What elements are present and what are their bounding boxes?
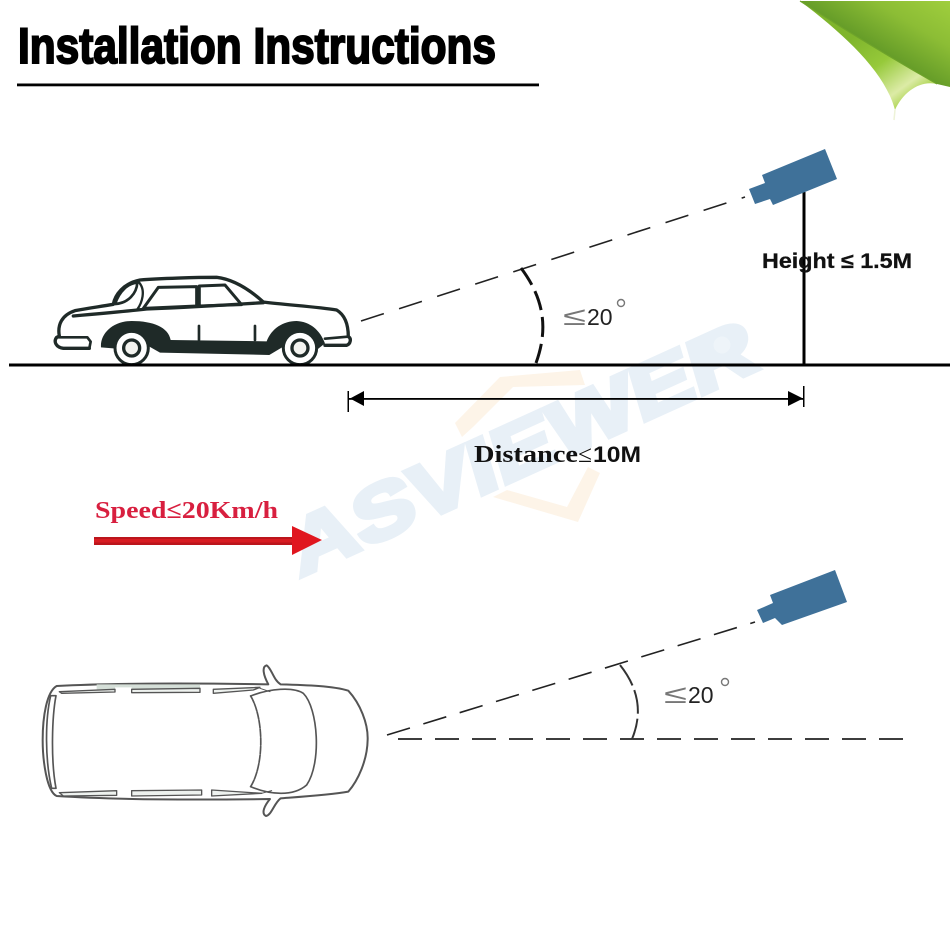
top view: angle label: ≤ <box>664 679 687 709</box>
top view: centre line <box>398 738 916 740</box>
page curl corner <box>800 1 950 120</box>
side view: angle label <box>563 300 624 331</box>
ground line <box>9 364 950 366</box>
top view: angle label: 20 <box>688 682 714 708</box>
side view: camera pole <box>802 192 806 365</box>
speed arrow <box>94 526 322 555</box>
speed label: Speed≤20Km/h <box>95 498 278 524</box>
distance dimension arrow <box>348 386 804 412</box>
top view: angle label <box>664 678 728 709</box>
distance label: Distance <box>474 442 578 468</box>
title underline <box>17 84 539 86</box>
top view: camera <box>757 570 847 625</box>
watermark: ASVIEWER: ASVIEWER <box>281 303 765 593</box>
side view: angle label: 20 <box>587 304 613 330</box>
side view: angle label: ≤ <box>563 301 586 331</box>
distance label <box>474 442 641 468</box>
top view: car <box>43 665 368 816</box>
title: Installation Instructions <box>18 18 496 74</box>
side view: camera <box>749 149 837 205</box>
side view: angle arc <box>521 268 543 363</box>
top view: line of sight <box>387 622 755 735</box>
side view: line of sight <box>361 197 745 321</box>
distance label: 10M <box>593 442 641 467</box>
watermark: ASVIEWER <box>281 303 765 593</box>
distance label: ≤ <box>578 442 592 468</box>
height label: Height ≤ 1.5M <box>762 250 912 273</box>
top view: angle arc <box>620 665 638 739</box>
side view: car <box>55 277 350 365</box>
